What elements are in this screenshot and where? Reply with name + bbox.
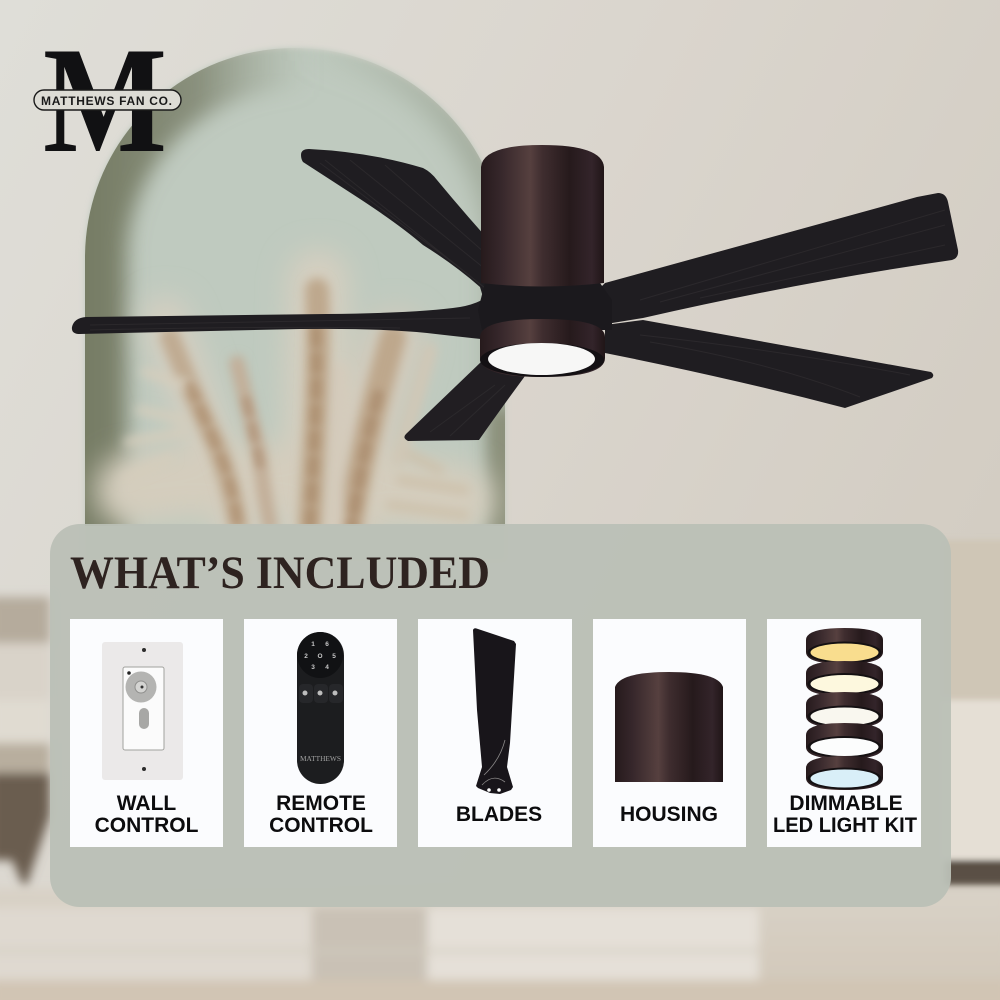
logo name plate xyxy=(34,90,181,110)
background: right sofa xyxy=(940,540,1000,886)
fan blade: lower left xyxy=(404,362,525,441)
card: dimmable LED light kit xyxy=(767,619,921,847)
card: housing xyxy=(593,619,746,847)
logo: Matthews Fan Co.: M xyxy=(43,16,167,184)
icon: remote: 2 xyxy=(304,653,308,660)
label: DIMMABLE xyxy=(789,792,903,815)
icon: remote: 6 xyxy=(325,641,329,648)
label: CONTROL xyxy=(95,814,199,837)
icon: remote: 3 xyxy=(311,664,315,671)
background: green arch niche xyxy=(85,48,505,560)
fan blade: upper left xyxy=(301,149,530,322)
fan hub xyxy=(478,283,612,330)
label: REMOTE xyxy=(276,792,366,815)
motor housing xyxy=(481,145,604,286)
icon: remote: O xyxy=(317,653,323,660)
ceiling fan xyxy=(72,145,958,441)
label: WALL xyxy=(117,792,176,815)
logo name plate: MATTHEWS FAN CO. xyxy=(41,94,172,108)
label: LED LIGHT KIT xyxy=(773,814,917,837)
background: pampas grass xyxy=(125,280,465,530)
icon: wall plate xyxy=(102,642,183,780)
background: floor xyxy=(0,888,1000,1000)
label xyxy=(95,792,199,837)
fan blade: lower right xyxy=(605,320,933,408)
card: blades xyxy=(418,619,572,847)
panel: what's included xyxy=(50,524,951,907)
wood grain xyxy=(90,160,945,436)
card: wall control xyxy=(70,619,223,847)
background: arch inner shadow xyxy=(85,48,505,524)
icon: housing xyxy=(615,672,723,782)
label xyxy=(773,792,917,837)
fan blade: right xyxy=(600,193,958,325)
card: remote control xyxy=(244,619,397,847)
icon: remote: MATTHEWS xyxy=(300,754,341,763)
background: left sofa cushion xyxy=(0,597,50,890)
icon: blade xyxy=(473,628,516,794)
icon: light stack xyxy=(806,628,883,790)
fan blade: far left xyxy=(72,300,492,340)
heading: WHAT’S INCLUDED xyxy=(70,547,490,599)
icon: remote xyxy=(297,632,344,784)
light kit ring xyxy=(480,319,605,377)
label: CONTROL xyxy=(269,814,373,837)
label xyxy=(269,792,373,837)
icon: remote: 5 xyxy=(332,653,336,660)
LED light lens xyxy=(480,343,604,377)
label: HOUSING xyxy=(620,803,718,826)
icon: remote: 4 xyxy=(325,664,329,671)
label: BLADES xyxy=(456,803,542,826)
icon: remote: 1 xyxy=(311,641,315,648)
